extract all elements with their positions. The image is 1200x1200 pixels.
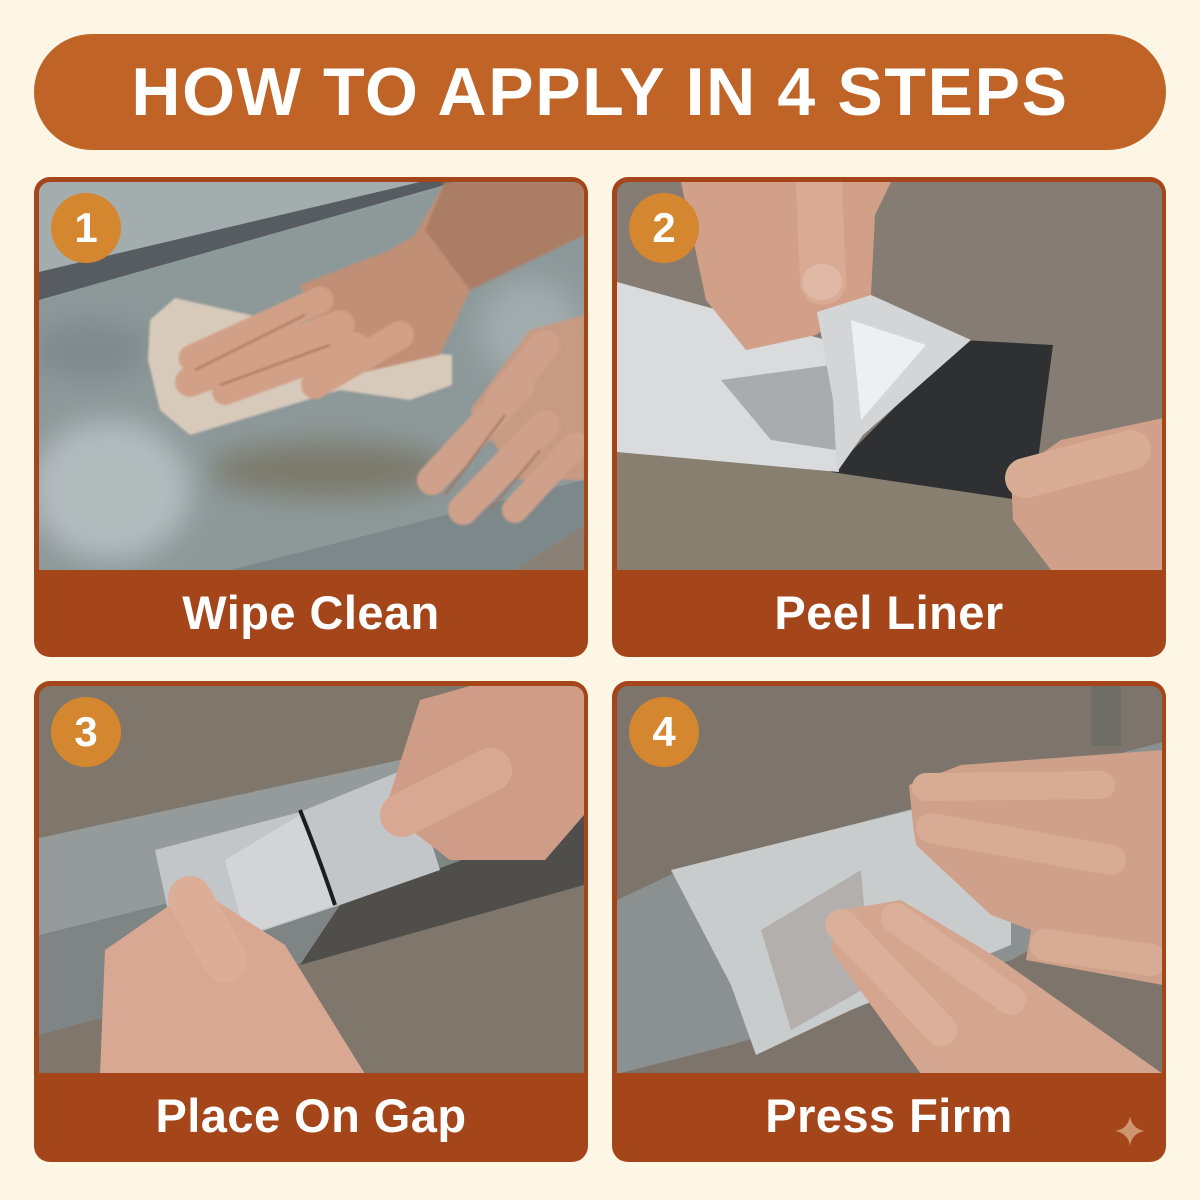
title [34, 34, 1166, 150]
number badge 4 [629, 697, 699, 767]
number badge 1: 1 [74, 204, 98, 251]
caption: Press Firm [765, 1089, 1013, 1142]
caption: Wipe Clean [182, 586, 440, 639]
number badge 1 [51, 193, 121, 263]
icon: sparkle [1115, 1116, 1144, 1146]
photo: peeling foil liner [617, 182, 1162, 570]
panel: step 2 peel liner [612, 177, 1166, 657]
photo: pressing tape on pipe [617, 686, 1162, 1073]
caption: Place On Gap [155, 1089, 466, 1142]
panel: step 4 press firm [612, 681, 1166, 1162]
number badge 3: 3 [74, 708, 98, 755]
number badge 3 [51, 697, 121, 767]
panel: step 1 wipe clean [34, 177, 588, 657]
photo: hands wiping metal [39, 182, 584, 570]
photo: placing foil over pipe gap [39, 686, 584, 1073]
panel: step 3 place on gap [34, 681, 588, 1162]
title: HOW TO APPLY IN 4 STEPS [131, 54, 1069, 130]
number badge 4: 4 [652, 708, 676, 755]
number badge 2 [629, 193, 699, 263]
caption: Peel Liner [774, 586, 1004, 639]
number badge 2: 2 [652, 204, 676, 251]
